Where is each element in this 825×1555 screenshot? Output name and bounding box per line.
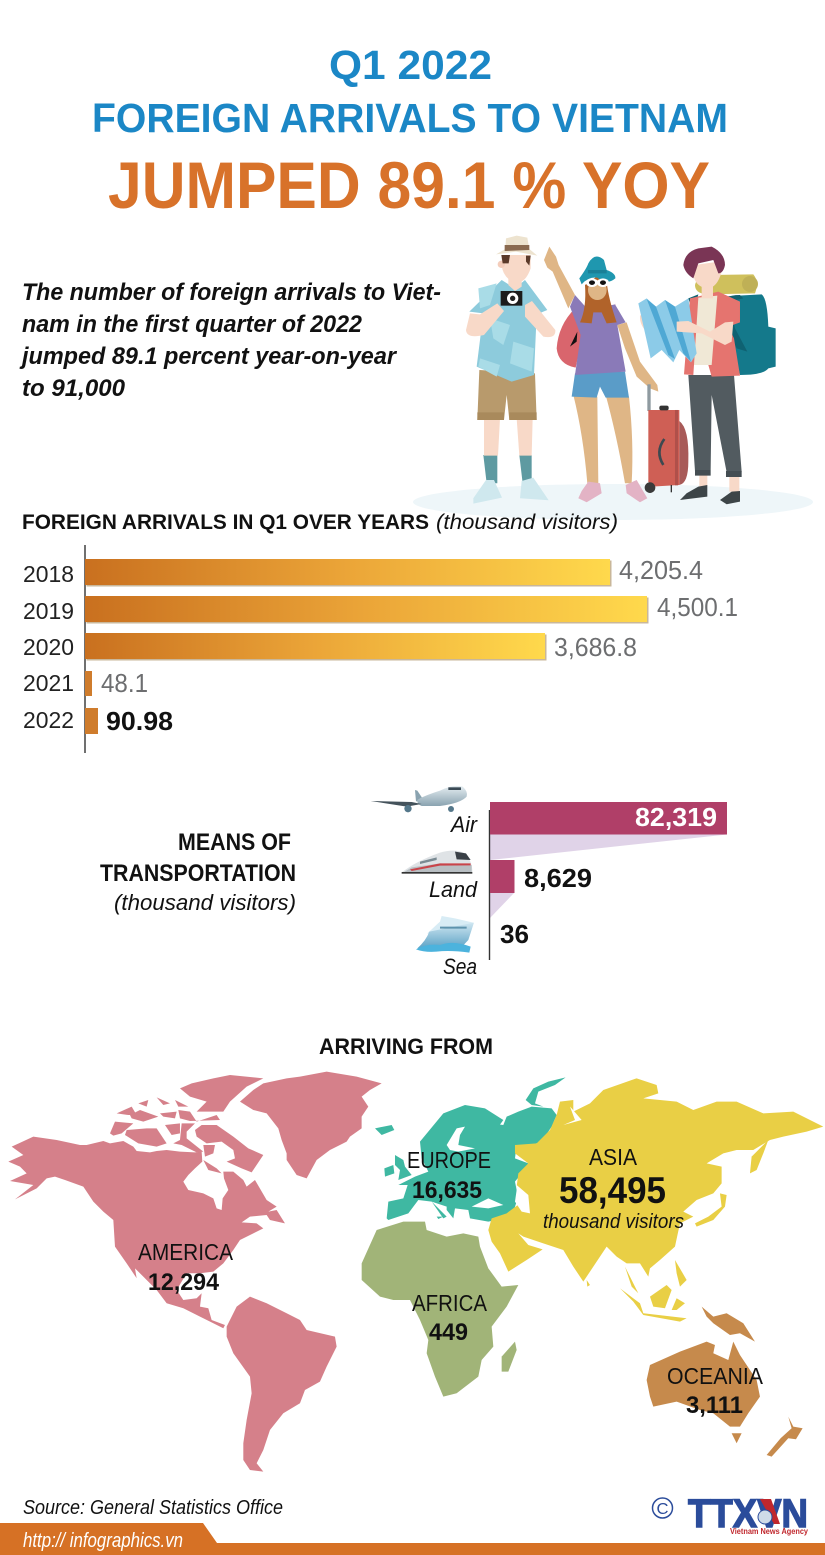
bar: air: 82,319 <box>635 802 717 832</box>
heading: means of transportation: MEANS OF <box>178 829 291 856</box>
bar 2019 <box>23 592 738 624</box>
bar: air: Air <box>449 812 479 837</box>
tourist with suitcase <box>544 247 658 502</box>
chart: means of transportation <box>429 802 727 979</box>
bar 2019: 2019 <box>23 598 74 624</box>
label: Africa <box>412 1290 488 1346</box>
label: Oceania: 3,111 <box>686 1392 743 1419</box>
logo: TTXVN: TTXVN <box>688 1492 808 1536</box>
logo: TTXVN: C <box>656 1501 668 1518</box>
bar: air <box>449 802 727 837</box>
bar: land <box>429 860 592 902</box>
suitcase <box>645 384 688 493</box>
label: America: AMERICA <box>138 1239 234 1265</box>
label: Europe: 16,635 <box>412 1177 482 1204</box>
label: America: 12,294 <box>148 1269 220 1296</box>
footer band <box>0 1523 825 1555</box>
label: Europe: EUROPE <box>407 1147 491 1173</box>
tourist with map <box>638 247 776 504</box>
bar: land: 8,629 <box>524 863 592 893</box>
intro text: jumped 89.1 percent year-on-year <box>19 343 398 370</box>
label: Asia: ASIA <box>589 1144 638 1170</box>
intro text: nam in the first quarter of 2022 <box>22 311 363 338</box>
label: Asia: thousand visitors <box>543 1211 684 1233</box>
bar: land: Land <box>429 877 478 902</box>
icon: cruise ship <box>416 916 474 953</box>
title <box>92 42 728 222</box>
title: FOREIGN ARRIVALS TO VIETNAM <box>92 95 728 141</box>
map region: Africa <box>362 1222 518 1397</box>
label: Africa: 449 <box>429 1319 468 1346</box>
bar 2020: 3,686.8 <box>554 632 637 662</box>
heading: bar chart <box>22 511 618 534</box>
bar 2018: 2018 <box>23 561 74 587</box>
bar 2020 <box>23 632 637 662</box>
title: Q1 2022 <box>329 42 492 88</box>
source: Source: General Statistics Office <box>23 1497 283 1519</box>
heading: arriving from: ARRIVING FROM <box>319 1034 493 1059</box>
map region: Europe <box>375 1077 566 1222</box>
bar 2022: 2022 <box>23 707 74 733</box>
tourist with camera <box>466 236 555 504</box>
intro text: The number of foreign arrivals to Viet- <box>22 279 441 306</box>
label: Asia: 58,495 <box>559 1170 666 1211</box>
bar 2019: 4,500.1 <box>657 592 738 622</box>
bar 2020: 2020 <box>23 634 74 660</box>
heading: bar chart: FOREIGN ARRIVALS IN Q1 OVER YEARS <box>22 511 429 534</box>
bar 2022 <box>23 706 173 736</box>
label: Oceania <box>667 1363 764 1419</box>
bar 2018 <box>23 555 703 587</box>
bar 2021 <box>23 668 148 698</box>
heading: means of transportation <box>100 829 296 915</box>
heading: means of transportation: TRANSPORTATION <box>100 860 296 887</box>
title: JUMPED 89.1 % YOY <box>108 148 710 222</box>
footer band: http:// infographics.vn <box>23 1530 183 1552</box>
illustration: three tourists <box>413 236 813 520</box>
intro text <box>19 279 441 402</box>
heading: means of transportation: (thousand visitors) <box>114 890 296 915</box>
label: Oceania: OCEANIA <box>667 1363 764 1389</box>
label: America <box>138 1239 234 1296</box>
label: Africa: AFRICA <box>412 1290 488 1316</box>
bar 2021: 2021 <box>23 670 74 696</box>
bar 2022: 90.98 <box>106 706 173 736</box>
bar: sea: 36 <box>500 919 529 949</box>
logo: TTXVN: Vietnam News Agency <box>730 1526 808 1536</box>
map region: America <box>8 1072 382 1472</box>
label: Asia <box>543 1144 684 1233</box>
bar 2018: 4,205.4 <box>619 555 703 585</box>
intro text: to 91,000 <box>22 375 126 402</box>
map region: Asia <box>488 1078 823 1322</box>
heading: bar chart: (thousand visitors) <box>436 511 618 534</box>
bar: sea <box>443 919 529 979</box>
world map <box>8 1072 823 1472</box>
bar 2021: 48.1 <box>101 668 148 698</box>
bar: sea: Sea <box>443 954 477 979</box>
label: Europe <box>407 1147 491 1204</box>
icon: airplane <box>371 786 467 812</box>
icon: train <box>402 851 472 874</box>
bar chart: arrivals over years <box>23 545 738 753</box>
map region: Oceania <box>647 1307 803 1457</box>
